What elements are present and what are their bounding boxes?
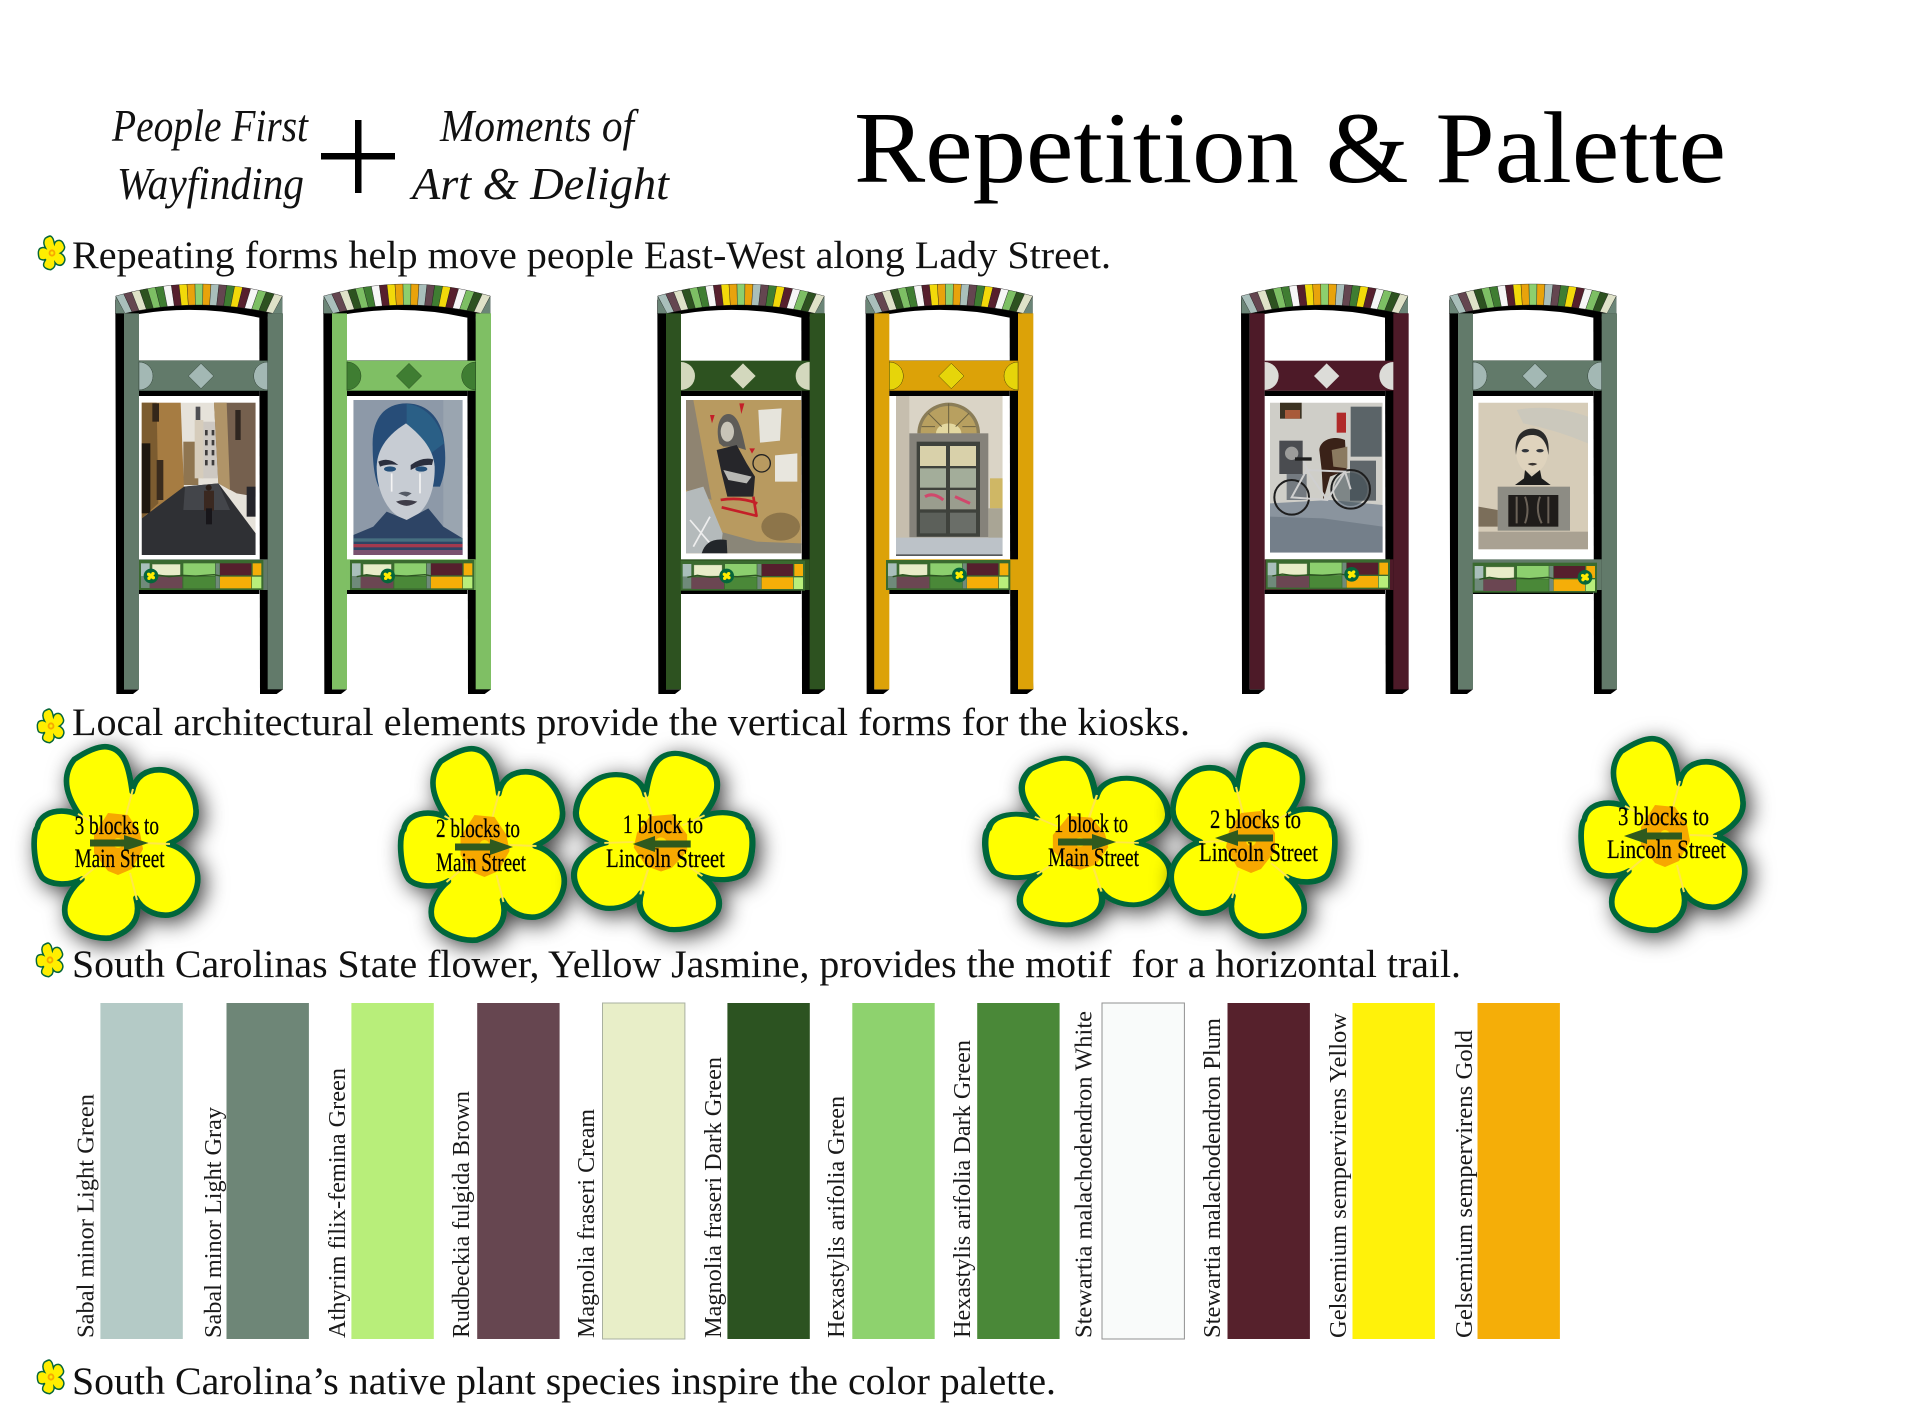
swatch: Gelsemium sempervirens Yellow: Gelsemium sempervirens Yellow — [1325, 1013, 1352, 1338]
swatch: Hexastylis arifolia Dark Green: Hexastylis arifolia Dark Green — [949, 1040, 976, 1338]
heading: local architectural elements: Local architectural elements provide the vertical forms for the kiosks. — [72, 701, 1190, 744]
kiosk 4 — [866, 284, 1033, 694]
header: people first wayfinding: People First — [111, 100, 309, 151]
flower sign: 3 blocks to Lincoln Street: Lincoln Street — [1607, 834, 1726, 864]
swatch: Sabal minor Light Green — [72, 1003, 183, 1339]
plus sign — [321, 120, 395, 193]
heading: repeating forms: Repeating forms help move people East-West along Lady Street. — [72, 234, 1111, 277]
swatch: Sabal minor Light Gray — [200, 1003, 309, 1339]
photo: face drawn above a window grate — [1478, 402, 1588, 550]
flower sign: 2 blocks to Lincoln Street: 2 blocks to — [1210, 804, 1301, 834]
swatch: Gelsemium sempervirens Yellow — [1325, 1003, 1435, 1339]
swatch: Stewartia malachodendron Plum: Stewartia malachodendron Plum — [1199, 1018, 1226, 1338]
flower sign: 3 blocks to Lincoln Street — [1581, 739, 1745, 930]
swatch: Magnolia fraseri Dark Green — [700, 1003, 810, 1339]
flower sign: 3 blocks to Main Street: 3 blocks to — [75, 810, 159, 840]
swatch: Magnolia fraseri Cream — [573, 1003, 685, 1339]
header: people first wayfinding: Wayfinding — [117, 158, 304, 209]
header: people first wayfinding — [111, 100, 309, 209]
swatch: Stewartia malachodendron White: Stewartia malachodendron White — [1071, 1011, 1098, 1338]
header: moments of art and delight — [409, 100, 670, 209]
kiosk 2 — [323, 284, 491, 694]
flower sign: 1 block to Main Street: 1 block to — [1054, 808, 1128, 838]
photo: bicycle against wall — [1270, 402, 1383, 553]
swatch: Magnolia fraseri Dark Green: Magnolia fraseri Dark Green — [700, 1057, 727, 1338]
swatch: Rudbeckia fulgida Brown — [448, 1003, 560, 1339]
flower sign: 2 blocks to Lincoln Street: Lincoln Street — [1199, 837, 1318, 867]
flower sign: 1 block to Main Street — [985, 758, 1170, 925]
kiosk 5 — [1241, 284, 1409, 694]
icon: flower bullet 1 — [38, 236, 65, 270]
flower sign: 1 block to Lincoln Street — [574, 753, 752, 930]
photo: stencil art on wall — [686, 400, 802, 554]
swatch: Hexastylis arifolia Green — [823, 1003, 935, 1339]
icon: flower bullet 4 — [37, 1360, 64, 1394]
flower sign: 1 block to Lincoln Street: 1 block to — [623, 809, 703, 839]
flower sign: 3 blocks to Lincoln Street: 3 blocks to — [1618, 801, 1709, 831]
flower sign: 3 blocks to Main Street — [34, 747, 198, 938]
flower sign: 2 blocks to Main Street: Main Street — [436, 847, 526, 877]
flower sign: 1 block to Lincoln Street: Lincoln Street — [606, 843, 725, 873]
kiosk 3 — [657, 284, 825, 694]
photo: street in Florence — [142, 402, 256, 555]
swatch: Magnolia fraseri Cream: Magnolia fraseri Cream — [573, 1109, 600, 1338]
kiosk 6 — [1449, 284, 1617, 694]
swatch: Gelsemium sempervirens Gold — [1451, 1003, 1560, 1339]
title: Repetition & Palette — [854, 92, 1726, 205]
flower sign: 1 block to Main Street: Main Street — [1048, 842, 1139, 872]
swatch: Gelsemium sempervirens Gold: Gelsemium sempervirens Gold — [1451, 1030, 1478, 1338]
icon: flower bullet 2 — [37, 709, 64, 743]
flower sign: 2 blocks to Main Street: 2 blocks to — [436, 813, 520, 843]
flower sign: 2 blocks to Main Street — [401, 749, 564, 940]
photo: mural of a woman — [353, 400, 463, 555]
kiosk 1 — [115, 284, 283, 694]
swatch: Hexastylis arifolia Dark Green — [949, 1003, 1060, 1339]
swatch: Athyrim filix-femina Green — [324, 1003, 434, 1339]
flower sign: 3 blocks to Main Street: Main Street — [75, 843, 165, 873]
header: moments of art and delight: Moments of — [439, 100, 640, 151]
swatch: Rudbeckia fulgida Brown: Rudbeckia fulgida Brown — [448, 1091, 475, 1338]
palette swatches — [72, 1003, 1560, 1339]
swatch: Stewartia malachodendron Plum — [1199, 1003, 1310, 1339]
header: moments of art and delight: Art & Delight — [409, 158, 670, 209]
swatch: Sabal minor Light Green: Sabal minor Light Green — [72, 1094, 100, 1338]
flower sign: 2 blocks to Lincoln Street — [1171, 745, 1335, 936]
heading: native plant species: South Carolina’s native plant species inspire the color palette. — [72, 1360, 1056, 1403]
swatch: Sabal minor Light Gray: Sabal minor Light Gray — [200, 1106, 227, 1338]
swatch: Hexastylis arifolia Green: Hexastylis arifolia Green — [823, 1096, 850, 1338]
swatch: Athyrim filix-femina Green: Athyrim filix-femina Green — [324, 1068, 351, 1338]
icon: flower bullet 3 — [36, 943, 63, 977]
heading: state flower: South Carolinas State flower, Yellow Jasmine, provides the motif for a horizontal trail. — [72, 943, 1461, 986]
swatch: Stewartia malachodendron White — [1071, 1003, 1184, 1339]
photo: arched doorway — [896, 396, 1003, 556]
